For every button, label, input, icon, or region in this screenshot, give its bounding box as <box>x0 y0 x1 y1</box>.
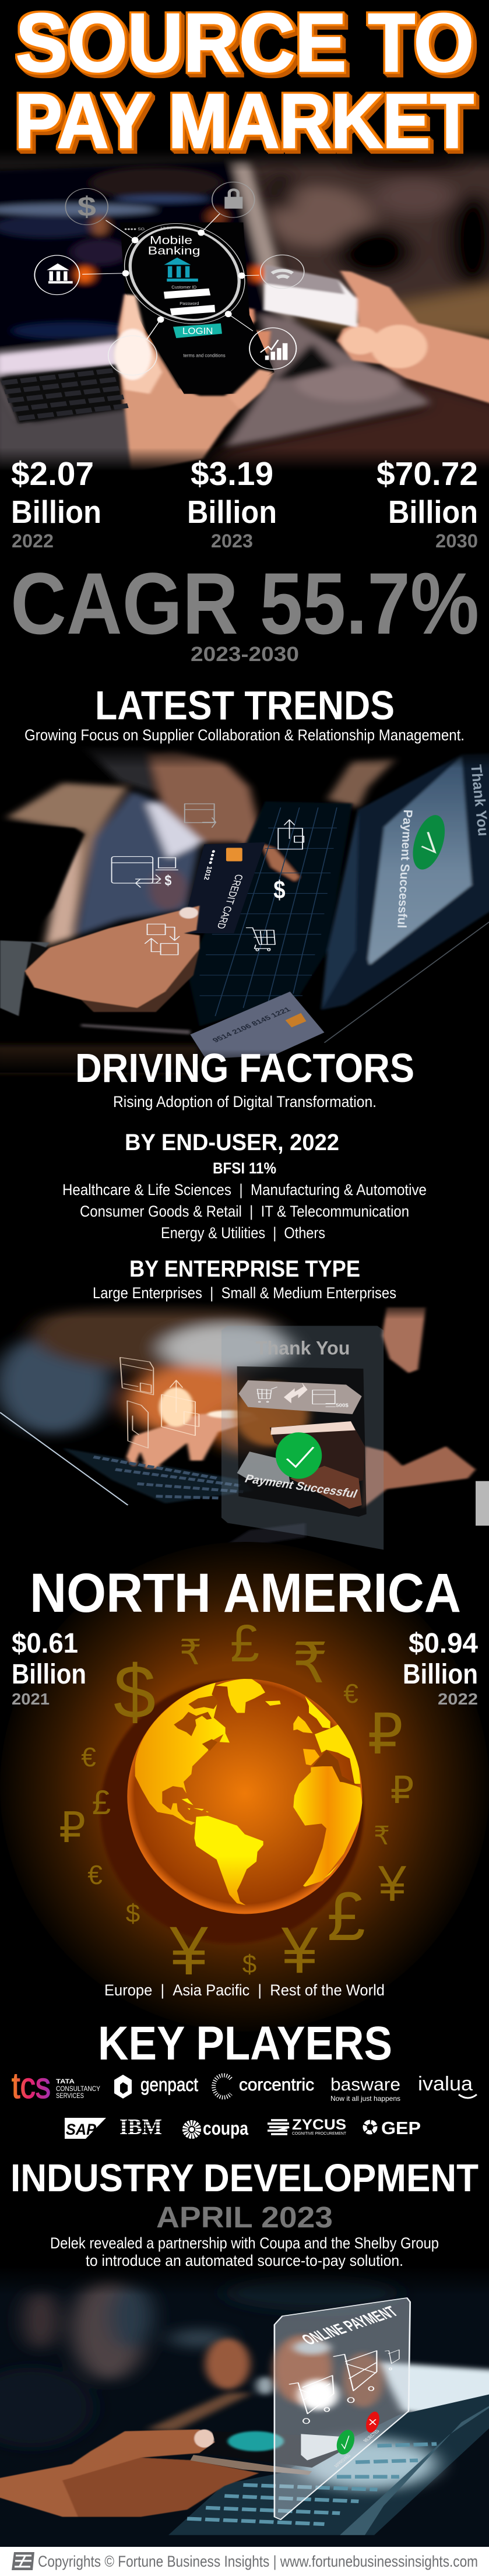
dollar signs: $ <box>273 876 286 904</box>
logo: GEP <box>365 2118 421 2138</box>
date: April 2023: APRIL 2023 <box>156 2201 333 2234</box>
logo: GEP: GEP <box>381 2118 421 2138</box>
globe illustration with currency symbols <box>0 1542 489 2032</box>
other regions list: Europe | Asia Pacific | Rest of the World <box>104 1981 385 1999</box>
phone screen content: Banking <box>148 245 200 257</box>
photo: credit card and laptop payment <box>0 744 489 1073</box>
driving factors text: Rising Adoption of Digital Transformation. <box>113 1093 377 1110</box>
black credit card: CREDIT CARD <box>214 874 245 929</box>
logo: SAP: SAP <box>66 2121 97 2138</box>
industry development text <box>50 2234 439 2269</box>
dollar signs <box>165 872 286 904</box>
photo: online payment hologram <box>0 2262 489 2548</box>
logo: TCS: TATA <box>56 2078 75 2085</box>
logo: SAP <box>65 2118 106 2139</box>
laptop edge <box>0 1412 128 1505</box>
phone with fingerprint <box>190 2431 354 2475</box>
currency symbols: ₹ <box>292 1632 328 1695</box>
second credit card: 9514 2106 8145 1221 <box>210 1006 293 1044</box>
South America <box>194 1816 263 1905</box>
laptop keyboard <box>168 2389 489 2535</box>
icons in rings: $ <box>78 191 96 222</box>
currency symbols: £ <box>92 1784 111 1822</box>
currency symbols: £ <box>230 1615 259 1673</box>
currency symbols: € <box>343 1678 358 1709</box>
stat: North America 2021 <box>12 1628 86 1708</box>
payment screen: Payment Successful <box>395 810 415 929</box>
logo: Coupa: coupa <box>203 2118 248 2139</box>
stat: 2022 market size: $2.07 <box>11 455 94 493</box>
end-user segment list: Healthcare & Life Sciences | Manufacturing & Automotive <box>62 1181 427 1199</box>
stat: 2022 market size <box>11 455 101 551</box>
footer <box>0 2547 489 2576</box>
logo: IBM: IBM <box>119 2115 162 2139</box>
logo: TCS: SERVICES <box>56 2092 84 2100</box>
laptop edge <box>324 921 489 1043</box>
logo: TCS <box>12 2066 100 2106</box>
industry development text: to introduce an automated source-to-pay solution. <box>86 2252 403 2269</box>
translucent payment panel: 500$ <box>336 1403 349 1408</box>
currency symbols: £ <box>327 1878 365 1955</box>
currency symbols: € <box>87 1860 103 1890</box>
stat: North America 2021: $0.61 <box>12 1628 78 1659</box>
stat: North America 2022 <box>403 1628 478 1708</box>
photo: payment successful hologram <box>0 1296 489 1580</box>
banking ring and nodes <box>34 182 304 375</box>
keyboard keys <box>199 807 337 1016</box>
logo: Basware: basware <box>330 2074 400 2094</box>
black credit card <box>181 842 265 933</box>
North America <box>135 1683 230 1825</box>
stat: 2023 market size: Billion <box>187 494 277 530</box>
heading: north america: NORTH AMERICA <box>30 1562 461 1624</box>
hero photo: mobile banking and card payment <box>0 147 489 473</box>
translucent payment panel: Thank You <box>256 1338 350 1358</box>
currency symbols: ¥ <box>378 1856 406 1912</box>
key player logos <box>12 2066 477 2139</box>
Iceland <box>265 1700 281 1706</box>
logo: Corcentric <box>214 2075 314 2097</box>
dark crescent <box>100 1680 364 1944</box>
CAGR figure: 2023-2030 <box>191 643 299 666</box>
heading: by enterprise type: BY ENTERPRISE TYPE <box>129 1256 360 1282</box>
transparent online payment panel <box>273 2298 410 2519</box>
stat: 2030 market size: $70.72 <box>377 455 478 493</box>
logo: Corcentric: corcentric <box>239 2075 314 2094</box>
Europe and Asia <box>305 1696 330 1728</box>
stat: 2022 market size: 2022 <box>12 530 54 551</box>
phone screen content: Mobile <box>150 234 192 247</box>
Caribbean <box>182 1798 209 1812</box>
currency symbols: ₽ <box>367 1703 403 1766</box>
payment screen <box>395 764 489 929</box>
heading: key players: KEY PLAYERS <box>98 2017 392 2070</box>
footer logo <box>12 2552 34 2570</box>
stat: 2030 market size: Billion <box>388 494 478 530</box>
stat: 2030 market size: 2030 <box>435 530 478 551</box>
logo: Basware: Now it all just happens <box>330 2094 400 2103</box>
phone screen content: terms and conditions <box>183 353 226 359</box>
stat: North America 2022: 2022 <box>438 1690 478 1708</box>
enterprise type list: Large Enterprises | Small & Medium Enterprises <box>93 1284 396 1302</box>
stat: North America 2022: Billion <box>403 1659 478 1690</box>
currency symbols: ₹ <box>374 1822 390 1850</box>
hand holding card <box>0 906 199 1016</box>
stat: North America 2021: 2021 <box>12 1690 50 1708</box>
phone screen content: ●●●● 5G <box>124 227 145 231</box>
Greenland <box>216 1679 265 1713</box>
stat: 2023 market size: $3.19 <box>191 455 273 493</box>
translucent payment panel <box>221 1326 384 1550</box>
end-user segment list: Consumer Goods & Retail | IT & Telecommunication <box>80 1203 409 1220</box>
currency symbols <box>59 1615 414 1990</box>
end-user segment list: Energy & Utilities | Others <box>161 1224 325 1242</box>
hand holding phone <box>0 2430 259 2517</box>
floating payment icons <box>112 804 304 955</box>
Madagascar <box>323 1864 339 1879</box>
logo: Ivalua: ivalua <box>418 2073 473 2095</box>
currency symbols: $ <box>242 1950 256 1978</box>
Africa <box>293 1766 363 1887</box>
logo: Zycus: COGNITIVE PROCUREMENT <box>292 2132 347 2136</box>
stat: 2023 market size: 2023 <box>211 530 253 551</box>
logo: TCS: CONSULTANCY <box>56 2085 100 2093</box>
currency symbols: ¥ <box>281 1914 318 1987</box>
phone screen content: 12:00 <box>160 226 172 230</box>
BFSI share: BFSI 11% <box>213 1159 276 1177</box>
phone screen content: LOGIN <box>182 326 213 336</box>
currency symbols: $ <box>126 1899 140 1928</box>
title <box>15 0 474 164</box>
transparent online payment panel: REJECTED <box>362 2429 381 2443</box>
second credit card <box>190 992 325 1059</box>
halo <box>0 1542 489 2032</box>
icons in rings <box>47 188 294 360</box>
currency symbols: ₹ <box>180 1633 202 1672</box>
stat: 2030 market size <box>377 455 478 551</box>
logo: Zycus: ZYCUS <box>292 2117 346 2133</box>
logo: Coupa <box>185 2118 248 2139</box>
globe sphere and continents <box>127 1679 363 1914</box>
Mediterranean <box>313 1750 356 1784</box>
stat: 2022 market size: Billion <box>11 494 101 530</box>
heading: driving factors: DRIVING FACTORS <box>75 1045 414 1091</box>
logo: Basware <box>330 2074 400 2103</box>
side box <box>476 1481 489 1526</box>
transparent online payment panel: APPROVED <box>332 2454 352 2468</box>
black credit card: ●●●● 1012 <box>202 849 217 881</box>
logo: Zycus <box>268 2117 347 2136</box>
keyboard keys <box>2 370 128 419</box>
phone screen content: Password <box>180 301 199 306</box>
currency symbols: ₽ <box>391 1769 414 1811</box>
dollar signs: $ <box>165 872 172 888</box>
stat: 2023 market size <box>187 455 277 551</box>
stat: North America 2022: $0.94 <box>409 1628 478 1659</box>
logo: TCS: tcs <box>12 2066 51 2106</box>
logo: Genpact: genpact <box>140 2074 198 2095</box>
industry development text: Delek revealed a partnership with Coupa and the Shelby Group <box>50 2234 439 2252</box>
currency symbols: $ <box>114 1649 156 1734</box>
holographic icons <box>120 1358 199 1448</box>
phone screen content <box>124 226 226 359</box>
stat: North America 2021: Billion <box>12 1659 86 1690</box>
phone screen content: Customer ID <box>171 285 196 290</box>
phone body <box>120 223 275 394</box>
currency symbols: ₽ <box>59 1805 86 1851</box>
currency symbols: ¥ <box>169 1913 208 1990</box>
translucent payment panel: Payment Successful <box>243 1472 360 1500</box>
heading: by end-user: BY END-USER, 2022 <box>125 1130 339 1155</box>
currency symbols: € <box>81 1742 96 1772</box>
heading: latest trends: LATEST TRENDS <box>95 683 395 728</box>
logo: Genpact <box>114 2074 198 2099</box>
end-user segment list <box>62 1181 427 1242</box>
keyboard keys <box>94 1457 243 1498</box>
